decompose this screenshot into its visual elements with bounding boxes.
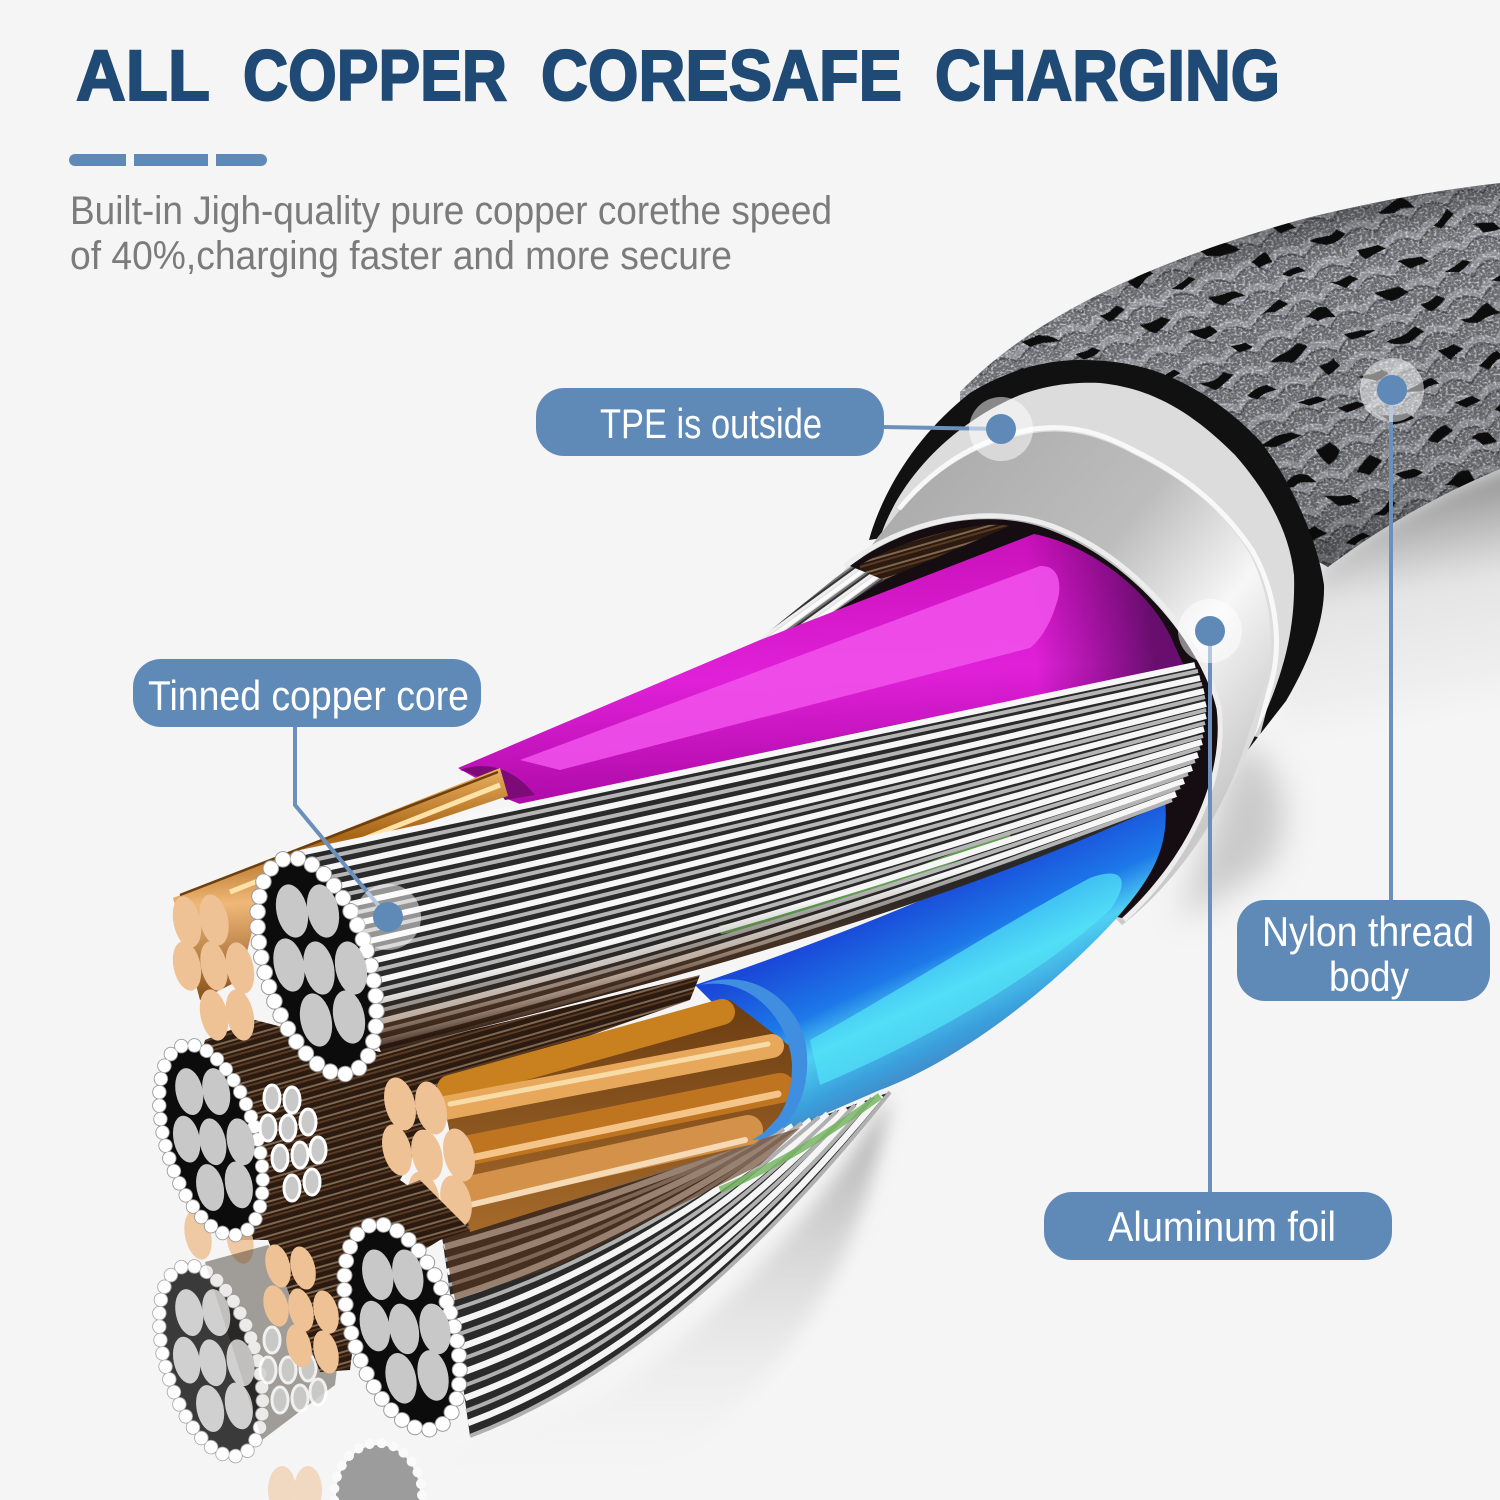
blue tube [695,800,1166,1142]
small dotted cluster [260,1085,326,1201]
callout: Aluminum foil [1044,599,1392,1260]
heading dashes [69,154,267,166]
aluminium sleeve [860,383,1294,925]
sleeve mouth interior [760,519,1218,918]
gold wire bundle back [173,768,508,1000]
cap: lower tinned [322,1211,482,1443]
title [76,37,1280,116]
callout: TPE is outside: TPE is outside [600,400,822,447]
cap: left tinned [139,1032,283,1248]
callout: Tinned copper core [133,659,481,950]
lower tinned strand bundle [440,1092,890,1436]
cap: copper lower [259,1242,343,1376]
sleeve mouth rim [845,516,1220,920]
main tinned strand bundle [300,665,1207,1052]
title: ALL [76,37,210,116]
magenta tube [458,534,1190,812]
braided nylon sleeve [960,183,1500,567]
reflected dark strands [205,1245,345,1440]
callout: Nylon thread body: Nylon thread [1262,908,1474,955]
lower copper strands [268,1180,470,1372]
cable reflection on surface [300,460,1500,1500]
title: CORESAFE [541,37,902,116]
callout: TPE is outside [536,388,1033,461]
reflected dotted cluster [260,1327,326,1413]
inner brown strands [860,525,1010,590]
cap: copper top [168,892,259,1043]
callout: Tinned copper core: Tinned copper core [148,672,469,719]
title: COPPER [243,37,507,116]
cap: lower-left reflected copper [180,1208,258,1266]
bottom reflected caps [268,1443,422,1500]
callout: Aluminum foil: Aluminum foil [1108,1203,1336,1250]
callout: Nylon thread body [1237,358,1490,1001]
copper wires [440,1000,795,1232]
callout: Nylon thread body: body [1329,953,1409,1000]
title: CHARGING [935,37,1280,116]
subtitle text: of 40%,charging faster and more secure [70,234,732,278]
dark strand mass [190,975,700,1310]
black ring [869,360,1324,760]
cap: main tinned [235,844,399,1088]
subtitle text: Built-in Jigh-quality pure copper corethe speed [70,189,832,233]
blue tube opening rim [700,979,807,1140]
subtitle text [70,189,832,278]
cap: lower-left tinned reflection [139,1253,283,1469]
cap: copper middle [377,1074,480,1230]
small grey strands at back [756,566,884,642]
